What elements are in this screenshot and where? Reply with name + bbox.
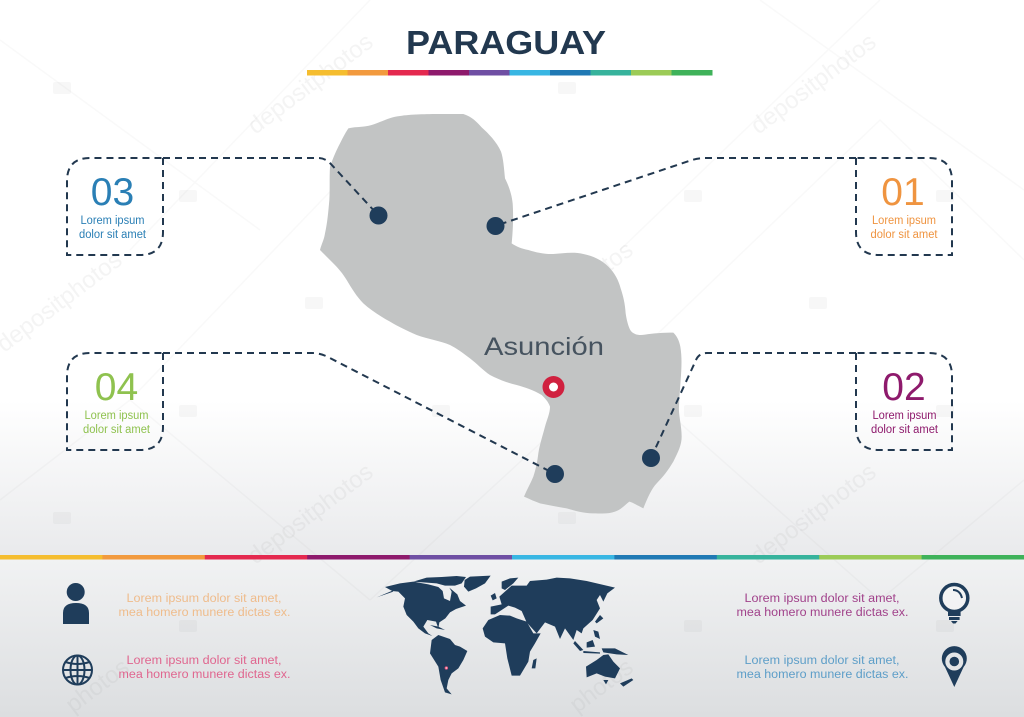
watermark: photos bbox=[61, 654, 134, 717]
leader line 04 bbox=[163, 353, 555, 474]
callout 03: Lorem ipsum bbox=[80, 215, 144, 227]
info text: bottom right: mea homero munere dictas ex. bbox=[736, 669, 908, 681]
watermark: photos bbox=[565, 654, 638, 717]
callout 03: dolor sit amet bbox=[79, 229, 147, 241]
icon: person bbox=[63, 583, 89, 624]
callout 04: 04 bbox=[95, 366, 138, 409]
callout 03: 03 bbox=[91, 171, 134, 214]
leader line 02 bbox=[651, 353, 856, 458]
info text: top right: Lorem ipsum dolor sit amet, bbox=[744, 593, 900, 605]
leader line 03 bbox=[163, 158, 378, 215]
info text: top left: Lorem ipsum dolor sit amet, bbox=[126, 593, 282, 605]
info text: bottom left bbox=[118, 655, 290, 681]
title: PARAGUAY bbox=[406, 24, 606, 61]
leader line 01 bbox=[495, 158, 856, 226]
info text: top left: mea homero munere dictas ex. bbox=[118, 607, 290, 619]
callout 04: Lorem ipsum bbox=[84, 410, 148, 422]
capital pin bbox=[542, 376, 564, 398]
info text: top right bbox=[736, 593, 908, 619]
info text: bottom left: mea homero munere dictas ex. bbox=[118, 669, 290, 681]
callout 01 bbox=[856, 158, 952, 255]
watermark: depositphotos bbox=[243, 28, 378, 140]
map of Paraguay bbox=[320, 114, 682, 514]
section colour bar bbox=[0, 555, 1024, 560]
watermark: depositphotos bbox=[503, 236, 638, 348]
callout 01: 01 bbox=[881, 171, 925, 214]
callout 02: Lorem ipsum bbox=[872, 410, 936, 422]
info text: bottom left: Lorem ipsum dolor sit amet, bbox=[126, 655, 282, 667]
icon: globe bbox=[63, 656, 92, 684]
capital label: Asunción bbox=[484, 333, 604, 361]
callout 03 bbox=[67, 158, 163, 255]
title colour bar bbox=[307, 70, 712, 76]
callout 04: dolor sit amet bbox=[83, 424, 151, 436]
callout 02 bbox=[856, 353, 952, 450]
info text: top right: mea homero munere dictas ex. bbox=[736, 607, 908, 619]
callout 02: dolor sit amet bbox=[871, 424, 939, 436]
map marker dots bbox=[370, 206, 660, 483]
info text: top left bbox=[118, 593, 290, 619]
info text: bottom right: Lorem ipsum dolor sit amet, bbox=[744, 655, 900, 667]
icon: location pin bbox=[942, 646, 967, 687]
callout 02: 02 bbox=[882, 366, 926, 409]
world map bbox=[377, 576, 633, 694]
watermark: depositphotos bbox=[746, 458, 881, 570]
callout 01: Lorem ipsum bbox=[872, 215, 936, 227]
watermark: depositphotos bbox=[243, 458, 378, 570]
info text: bottom right bbox=[736, 655, 908, 681]
watermark: depositphotos bbox=[746, 28, 881, 140]
callout 04 bbox=[67, 353, 163, 450]
icon: light bulb bbox=[941, 584, 968, 624]
callout 01: dolor sit amet bbox=[870, 229, 938, 241]
